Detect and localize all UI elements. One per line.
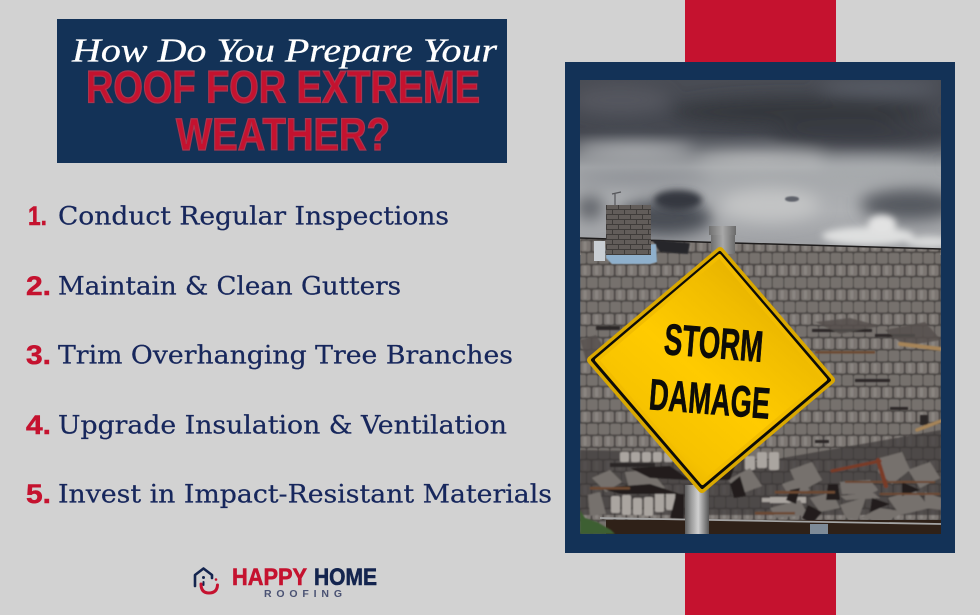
roof tiles <box>580 238 941 534</box>
roof ridge line <box>580 238 941 249</box>
sign post <box>685 485 709 534</box>
list item 4: 4. <box>26 410 51 440</box>
list item 3: Trim Overhanging Tree Branches <box>58 340 513 370</box>
list item 1: Conduct Regular Inspections <box>58 202 449 230</box>
red vertical stripe <box>685 0 836 615</box>
broken rafter <box>832 344 941 486</box>
title line: How Do You Prepare Your: How Do You Prepare Your <box>71 32 498 70</box>
numbered list <box>26 201 552 509</box>
sign text DAMAGE: DAMAGE <box>647 370 772 429</box>
list item 2: 2. <box>26 271 51 301</box>
wordmark HAPPY: HAPPY <box>232 564 307 591</box>
wordmark HOME: HOME <box>314 564 377 591</box>
pale tiles row <box>611 452 806 516</box>
photo: storm damaged roof <box>570 80 960 534</box>
list item 1: 1. <box>28 201 47 231</box>
title panel <box>57 19 507 163</box>
title line: WEATHER?: WEATHER? <box>176 109 390 160</box>
logo: Happy Home Roofing <box>195 564 377 600</box>
photo frame <box>565 62 955 553</box>
debris base layer <box>580 430 941 515</box>
list item 5: Invest in Impact-Resistant Materials <box>58 480 552 508</box>
metal flue <box>709 226 736 254</box>
icon: house with smile <box>195 568 218 593</box>
title line: ROOF FOR EXTREME: ROOF FOR EXTREME <box>86 62 480 112</box>
roof damage and debris <box>580 318 941 524</box>
wordmark ROOFING: ROOFING <box>264 588 342 600</box>
sign text STORM: STORM <box>662 315 765 372</box>
list item 5: 5. <box>26 479 51 509</box>
sky with storm clouds <box>570 80 960 255</box>
list item 4: Upgrade Insulation & Ventilation <box>58 410 507 440</box>
gutter and wall <box>580 510 941 534</box>
storm damage warning sign <box>591 251 831 489</box>
list item 3: 3. <box>26 340 51 370</box>
chimney <box>594 192 690 264</box>
list item 2: Maintain & Clean Gutters <box>58 272 401 300</box>
